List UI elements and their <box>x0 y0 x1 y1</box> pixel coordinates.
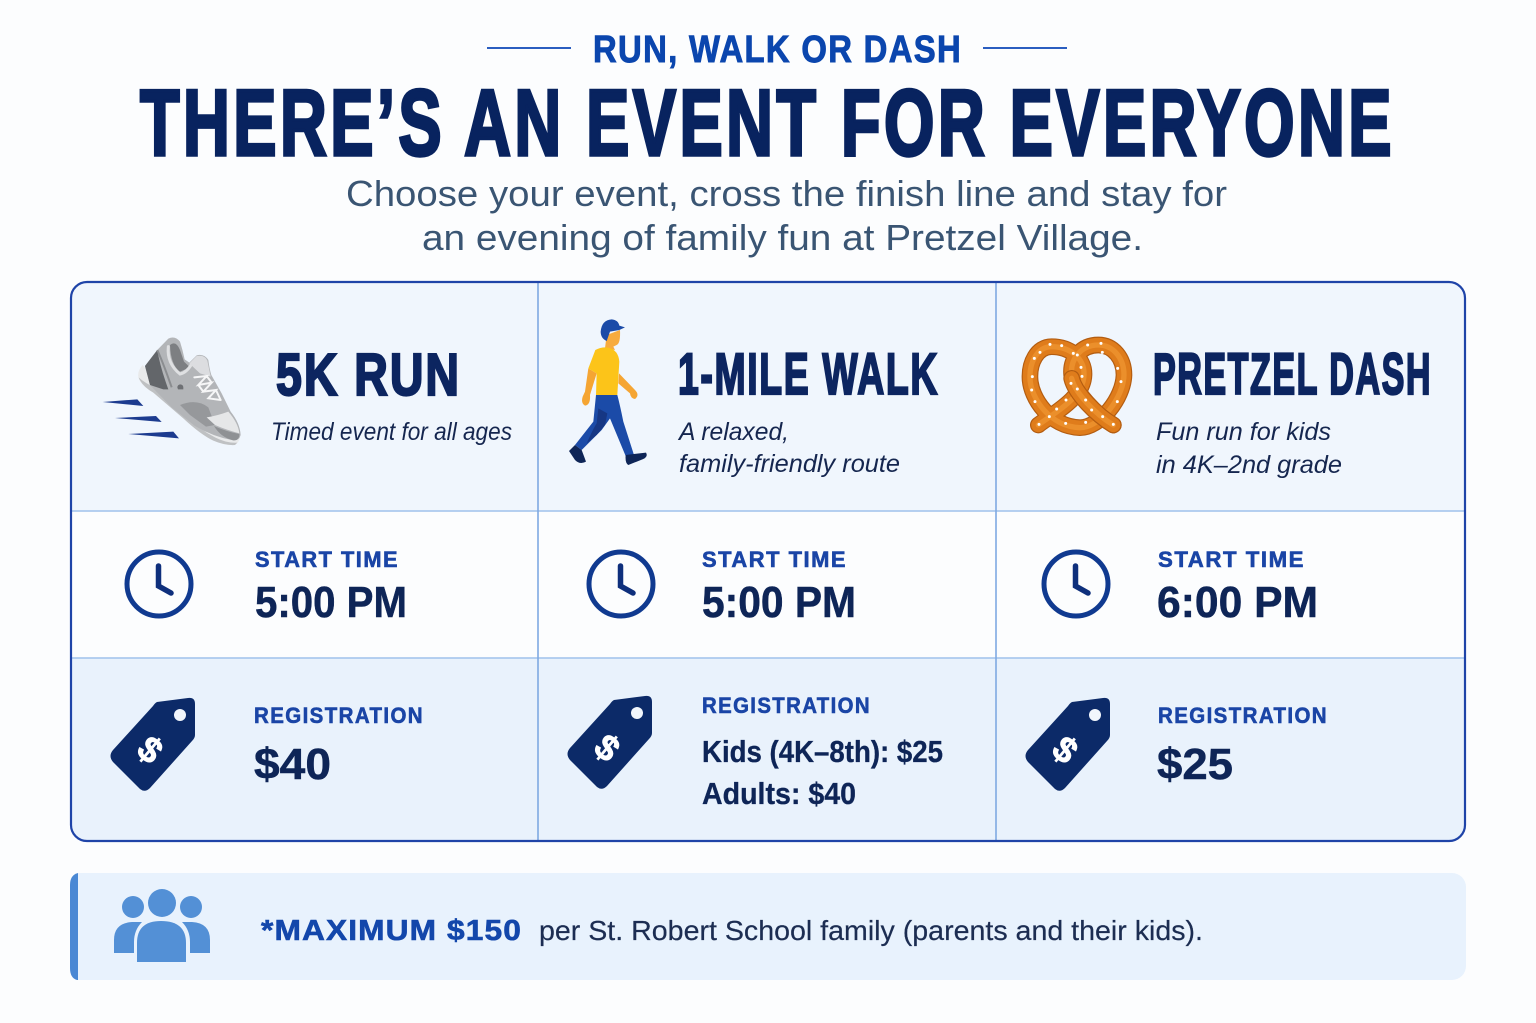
registration: pretzel dash <box>1157 703 1328 789</box>
start time: 5K run: START TIME <box>255 547 399 572</box>
callout text <box>261 915 1203 947</box>
panel: event comparison table <box>71 282 1465 841</box>
icon: price tag: $ <box>129 727 171 772</box>
registration: 1-mile walk <box>702 693 943 811</box>
registration: 5K run: $40 <box>254 740 331 789</box>
registration: 1-mile walk: Adults: $40 <box>702 776 856 811</box>
registration: 5K run <box>254 703 424 789</box>
icon: clock <box>589 552 653 616</box>
column: 1-mile walk <box>568 319 943 811</box>
icon: price tag <box>568 696 652 789</box>
subtitle: Choose your event, cross the finish line and stay for <box>346 173 1227 214</box>
event description: 1-mile walk: A relaxed, <box>677 418 789 446</box>
start time: 1-mile walk: 5:00 PM <box>702 578 856 627</box>
event description: 1-mile walk <box>677 418 900 478</box>
icon: price tag: $ <box>586 725 628 770</box>
icon: family group <box>114 889 210 962</box>
subtitle: an evening of family fun at Pretzel Village. <box>422 217 1143 258</box>
start time: pretzel dash <box>1157 547 1318 627</box>
start time: pretzel dash: START TIME <box>1158 547 1305 572</box>
column: 5K run <box>103 338 512 791</box>
icon: price tag <box>110 698 195 791</box>
eyebrow heading with rules: RUN, WALK OR DASH <box>593 29 962 71</box>
event description: pretzel dash: in 4K–2nd grade <box>1156 451 1342 479</box>
icon: walking person <box>569 319 647 465</box>
event description: pretzel dash: Fun run for kids <box>1156 418 1331 446</box>
callout text: *MAXIMUM $150 <box>261 915 522 947</box>
registration: 1-mile walk: REGISTRATION <box>702 693 871 718</box>
icon: price tag: $ <box>1044 727 1086 772</box>
icon: clock <box>127 552 191 616</box>
event name: 1-mile walk: 1-MILE WALK <box>678 342 939 407</box>
icon: price tag <box>1026 698 1110 791</box>
icon: clock <box>1044 552 1108 616</box>
start time: pretzel dash: 6:00 PM <box>1157 578 1318 627</box>
callout: family maximum <box>70 873 1466 980</box>
registration: 1-mile walk: Kids (4K–8th): $25 <box>702 734 943 769</box>
event description: 1-mile walk: family-friendly route <box>679 450 900 478</box>
subtitle <box>346 173 1227 258</box>
icon: pretzel <box>1030 342 1124 428</box>
event name: 5K run: 5K RUN <box>276 342 461 408</box>
start time: 5K run: 5:00 PM <box>255 578 407 627</box>
registration: 5K run: REGISTRATION <box>254 703 424 728</box>
event description: pretzel dash <box>1156 418 1342 479</box>
registration: pretzel dash: $25 <box>1157 740 1233 789</box>
icon: running shoe <box>103 338 241 445</box>
registration: pretzel dash: REGISTRATION <box>1158 703 1328 728</box>
event description: 5K run: Timed event for all ages <box>271 418 512 446</box>
start time: 5K run <box>255 547 407 627</box>
start time: 1-mile walk: START TIME <box>702 547 847 572</box>
start time: 1-mile walk <box>702 547 856 627</box>
column: pretzel dash <box>1026 342 1432 791</box>
callout text: per St. Robert School family (parents and their kids). <box>539 915 1203 946</box>
